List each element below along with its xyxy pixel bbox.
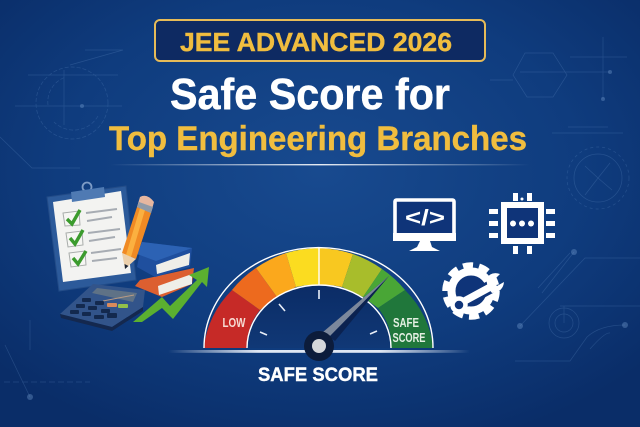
icon: gear and wrench — [446, 266, 504, 316]
gauge base line — [168, 350, 470, 353]
gauge outline — [204, 248, 433, 348]
gauge needle — [304, 276, 389, 361]
badge: JEE Advanced 2026: JEE ADVANCED 2026 — [180, 27, 452, 57]
gauge ticks — [260, 290, 377, 335]
title line 2: Top Engineering Branches — [109, 120, 527, 158]
badge: JEE Advanced 2026 — [155, 20, 485, 61]
gauge label low: LOW — [222, 316, 246, 330]
icon: rising arrow — [133, 267, 209, 322]
icon: books — [135, 242, 194, 297]
gauge colour bands — [204, 248, 433, 348]
icon: calculator — [60, 284, 145, 331]
icon: clipboard checklist — [47, 182, 136, 291]
gauge caption: SAFE SCORE — [258, 364, 378, 386]
icon: computer code monitor: </> — [405, 205, 445, 230]
title underline — [110, 164, 530, 165]
icon: pencil — [122, 196, 154, 269]
gauge: SCORE — [392, 331, 426, 345]
icon: computer code monitor — [393, 200, 456, 251]
gauge dial interior — [247, 285, 391, 348]
gauge — [168, 248, 470, 361]
gauge label safe score: SAFE — [393, 316, 419, 330]
icon: microchip — [489, 193, 555, 254]
title line 1: Safe Score for — [170, 70, 450, 119]
